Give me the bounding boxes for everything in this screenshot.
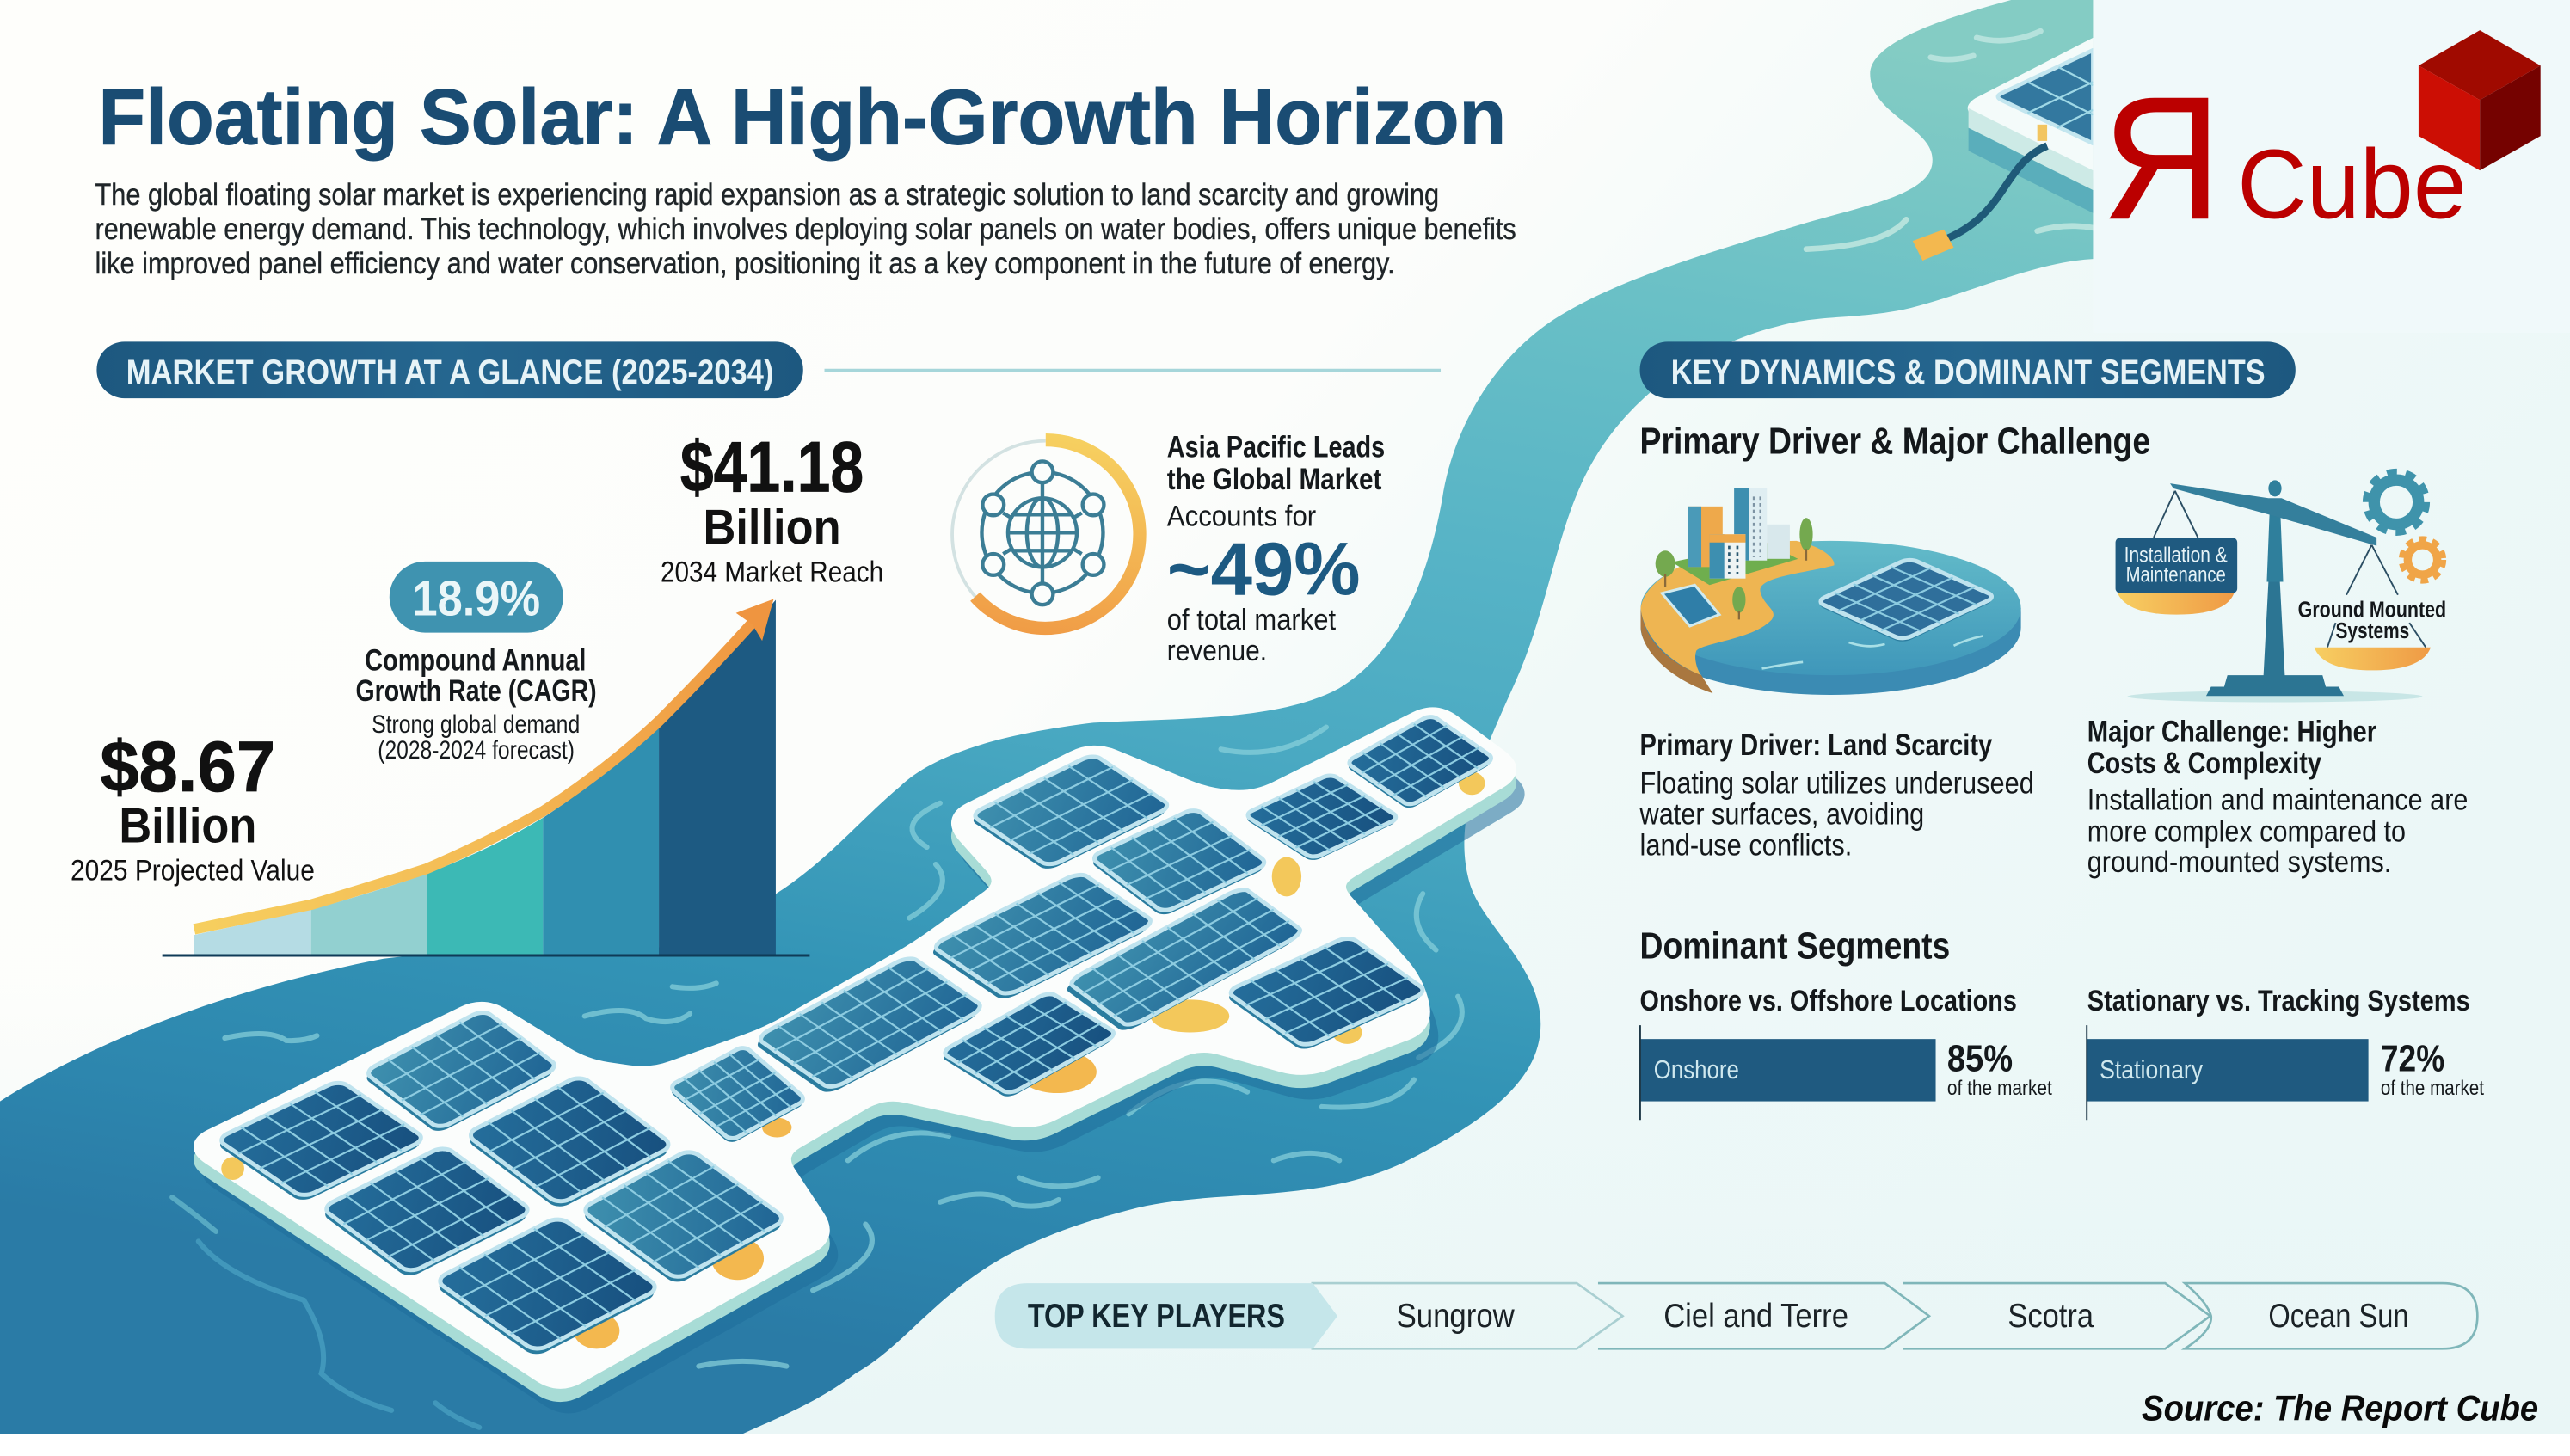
icon: land and water disc [1641, 488, 2021, 695]
asia pacific callout: ~49% [1167, 527, 1361, 611]
water ripples [172, 728, 1462, 1428]
chevron: scotra: Scotra [2007, 1298, 2094, 1335]
upper river detail: panel corner, cable and buoy [1806, 31, 2093, 261]
icon: globe ring [952, 440, 1140, 628]
logo wordmark: Я [2103, 60, 2221, 255]
text: primary driver: Floating solar utilizes underuseed [1640, 766, 2034, 800]
text: major challenge: more complex compared to [2087, 815, 2406, 849]
text: major challenge: Costs & Complexity [2087, 746, 2321, 780]
chevron: scotra [1903, 1283, 2210, 1348]
chevron: ciel and terre: Ciel and Terre [1663, 1298, 1848, 1335]
bottom white strip [0, 1434, 2570, 1456]
label pill: top key players [995, 1283, 1337, 1348]
heading pill: market growth [96, 341, 803, 398]
tag: ground mounted systems: Ground Mounted [2298, 598, 2446, 622]
text: primary driver: water surfaces, avoiding [1639, 798, 1924, 832]
text: primary driver: Primary Driver: Land Scarcity [1640, 728, 1993, 762]
tag: installation and maintenance: Maintenance [2126, 563, 2226, 587]
solar panels [212, 715, 1497, 1357]
text: primary driver [1639, 728, 2034, 863]
stat: CAGR [356, 562, 597, 765]
stat: CAGR: Strong global demand [372, 710, 580, 739]
logo panel [2093, 0, 2570, 333]
title: Floating Solar: A High-Growth Horizon [98, 74, 1506, 162]
heading pill: key dynamics [1640, 341, 2296, 398]
icon: red cube [2419, 30, 2541, 170]
bar: stationary 72 percent [2087, 985, 2484, 1120]
floating solar platform [200, 714, 1518, 1407]
bar: stationary 72 percent: of the market [2381, 1077, 2484, 1100]
stat: 2025 value: Billion [119, 798, 256, 853]
stat: CAGR: 18.9% [412, 571, 540, 626]
text: major challenge: Major Challenge: Higher [2087, 715, 2376, 748]
icon: orange gear [2402, 539, 2443, 581]
growth arrow [194, 599, 773, 929]
bar: onshore 85 percent: Onshore [1654, 1055, 1739, 1084]
tag: installation and maintenance [2116, 538, 2237, 593]
heading pill: key dynamics: KEY DYNAMICS & DOMINANT SEGMENTS [1671, 353, 2266, 391]
text: major challenge: ground-mounted systems. [2087, 845, 2391, 879]
bar: stationary 72 percent: Stationary vs. Tracking Systems [2087, 985, 2470, 1017]
bar: onshore 85 percent: 85% [1947, 1038, 2013, 1080]
top key players strip [995, 1283, 2477, 1348]
subheading: dominant segments: Dominant Segments [1640, 925, 1950, 968]
stat: 2034 value: 2034 Market Reach [661, 556, 883, 588]
tag: ground mounted systems: Systems [2335, 619, 2409, 643]
stat: 2034 value: $41.18 [680, 427, 864, 507]
label pill: top key players: TOP KEY PLAYERS [1028, 1298, 1285, 1335]
intro paragraph: The global floating solar market is experiencing rapid expansion as a strategic solution to land scarcity and growing [95, 178, 1439, 212]
text: major challenge [2087, 715, 2468, 879]
bar: onshore 85 percent [1640, 985, 2052, 1120]
stat: 2034 value [661, 427, 883, 588]
stat: CAGR: Growth Rate (CAGR) [356, 674, 597, 708]
platform side [200, 727, 1509, 1395]
text: major challenge: Installation and maintenance are [2087, 783, 2468, 816]
logo wordmark [2103, 60, 2467, 255]
logo wordmark: Cube [2237, 130, 2467, 239]
stat: CAGR: (2028-2024 forecast) [378, 736, 575, 765]
tag: installation and maintenance: Installation & [2124, 544, 2228, 568]
tag: ground mounted systems [2298, 598, 2446, 643]
asia pacific callout: Accounts for [1167, 501, 1316, 533]
subheading: driver and challenge: Primary Driver & Major Challenge [1640, 420, 2150, 462]
bar: onshore 85 percent: Onshore vs. Offshore Locations [1640, 985, 2017, 1017]
asia pacific callout: the Global Market [1167, 463, 1382, 496]
asia pacific callout: of total market [1167, 604, 1336, 636]
icon: balance scale and gears [2116, 473, 2446, 703]
icon: teal gear [2367, 473, 2426, 531]
stat: 2034 value: Billion [704, 501, 841, 556]
chevron: ciel and terre [1598, 1283, 1929, 1348]
chevron: sungrow [1311, 1283, 1623, 1348]
chevron: sungrow: Sungrow [1397, 1298, 1515, 1335]
stat: 2025 value [71, 726, 315, 887]
asia pacific callout: revenue. [1167, 635, 1267, 667]
bar: onshore 85 percent: of the market [1947, 1077, 2052, 1100]
text: primary driver: land-use conflicts. [1640, 829, 1852, 863]
intro paragraph [95, 178, 1516, 280]
chevron: ocean sun [2185, 1283, 2477, 1348]
asia pacific callout: Asia Pacific Leads [1167, 431, 1385, 464]
yellow floats [221, 772, 1485, 1348]
intro paragraph: like improved panel efficiency and water conservation, positioning it as a key component in the future of energy. [95, 247, 1395, 280]
stat: CAGR: Compound Annual [365, 643, 586, 677]
source credit: Source: The Report Cube [2142, 1387, 2538, 1428]
stat: 2025 value: $8.67 [100, 726, 275, 807]
bar: stationary 72 percent: 72% [2381, 1038, 2444, 1080]
chevron: ocean sun: Ocean Sun [2268, 1298, 2408, 1335]
stat: 2025 value: 2025 Projected Value [71, 854, 315, 887]
growth area chart [163, 599, 809, 955]
bar: stationary 72 percent: Stationary [2100, 1055, 2204, 1084]
heading pill: market growth: MARKET GROWTH AT A GLANCE (2025-2034) [126, 353, 773, 391]
asia pacific callout [1167, 431, 1385, 667]
intro paragraph: renewable energy demand. This technology, which involves deploying solar panels on water bodies, offers unique benefits [95, 212, 1516, 246]
platform deck [200, 714, 1509, 1382]
platform shadow [208, 739, 1518, 1407]
